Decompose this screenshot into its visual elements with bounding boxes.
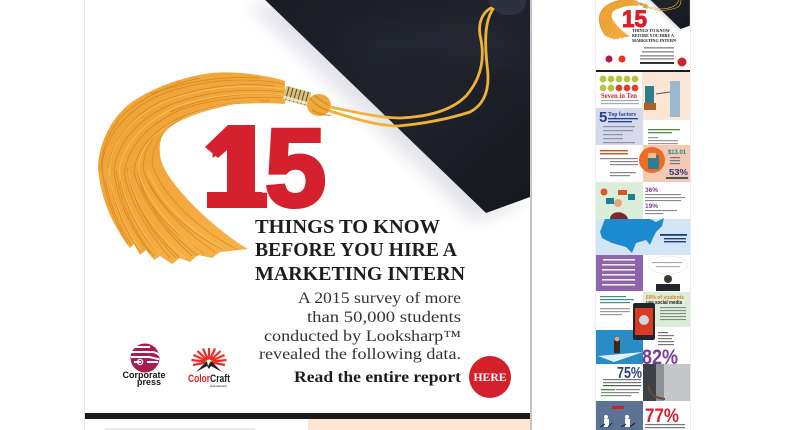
title [255, 216, 465, 285]
graduation cap and tassel image [98, 0, 530, 264]
thumbnail: paper plane panel [596, 330, 643, 364]
logo: Corporate Press: Corporate [122, 370, 166, 380]
thumbnail: top factors: Top factors [608, 112, 637, 118]
number 15: 15 [207, 107, 326, 230]
logo: Corporate Press [122, 344, 166, 387]
survey description: than 50,000 students [307, 309, 461, 326]
thumbnail hero text: 15 [622, 6, 647, 33]
thumbnail: students on social media: 69% of students [646, 295, 684, 301]
panel: main poster [84, 0, 532, 430]
next section faint heading [105, 428, 255, 430]
thumbnail: 82 percent [642, 332, 678, 369]
read the report call to action: Read the entire report [294, 369, 462, 386]
survey description: conducted by Looksharp™ [264, 328, 461, 345]
thumbnail: US map [596, 218, 690, 255]
thumbnail: running figures [596, 401, 643, 430]
thumbnail: 75 percent [601, 365, 642, 396]
HERE button: HERE [474, 370, 506, 384]
survey description [259, 290, 461, 363]
thumbnail hero text: BEFORE YOU HIRE A [632, 33, 675, 38]
thumbnail: social icons and percentages [596, 182, 685, 219]
thumbnail: social icons and percentages: 19% [645, 203, 658, 210]
thumbnail: 75 percent: 75% [617, 365, 642, 382]
thumbnail: students on social media [600, 292, 690, 327]
thumbnail: purple quote [596, 255, 688, 291]
thumbnail: students on social media: use social media [646, 300, 682, 306]
black divider bar [85, 413, 530, 419]
survey description: revealed the following data. [259, 346, 461, 363]
thumbnail divider [596, 70, 690, 72]
logo: ColorCraft: Great Impressions [210, 384, 227, 388]
thumbnail: pay section [600, 145, 690, 182]
thumbnail hero text: MARKETING INTERN [632, 38, 677, 43]
title: BEFORE YOU HIRE A [255, 239, 457, 261]
logo: ColorCraft: Craft [210, 373, 230, 385]
thumbnail hero image [599, 0, 690, 40]
title: THINGS TO KNOW [255, 216, 440, 238]
thumbnail: pay section: $13.01 [668, 150, 687, 156]
title: MARKETING INTERN [255, 263, 465, 285]
thumbnail: tablet [633, 303, 655, 340]
logo: ColorCraft: Color [188, 373, 211, 385]
logo: Corporate Press: press [137, 377, 161, 387]
panel: thumbnail overview of the full infographic [595, 0, 691, 430]
HERE button [469, 356, 511, 398]
survey description: A 2015 survey of more [298, 290, 461, 307]
logo: ColorCraft [188, 348, 230, 388]
thumbnail: seven in ten [600, 72, 690, 120]
thumbnail: photo panel [643, 364, 690, 401]
thumbnail: top factors [596, 108, 680, 145]
thumbnail: top factors: 5 [599, 109, 607, 126]
thumbnail: social icons and percentages: 36% [645, 187, 658, 194]
thumbnail hero text: THINGS TO KNOW [632, 28, 670, 33]
thumbnail: 77 percent: 77% [645, 406, 679, 427]
next section peach panel [308, 419, 530, 430]
thumbnail: seven in ten: Seven in Ten [601, 92, 637, 100]
thumbnail: pay section: 53% [669, 168, 688, 177]
thumbnail hero text [606, 6, 686, 66]
thumbnail: 82 percent: 82% [642, 346, 678, 369]
